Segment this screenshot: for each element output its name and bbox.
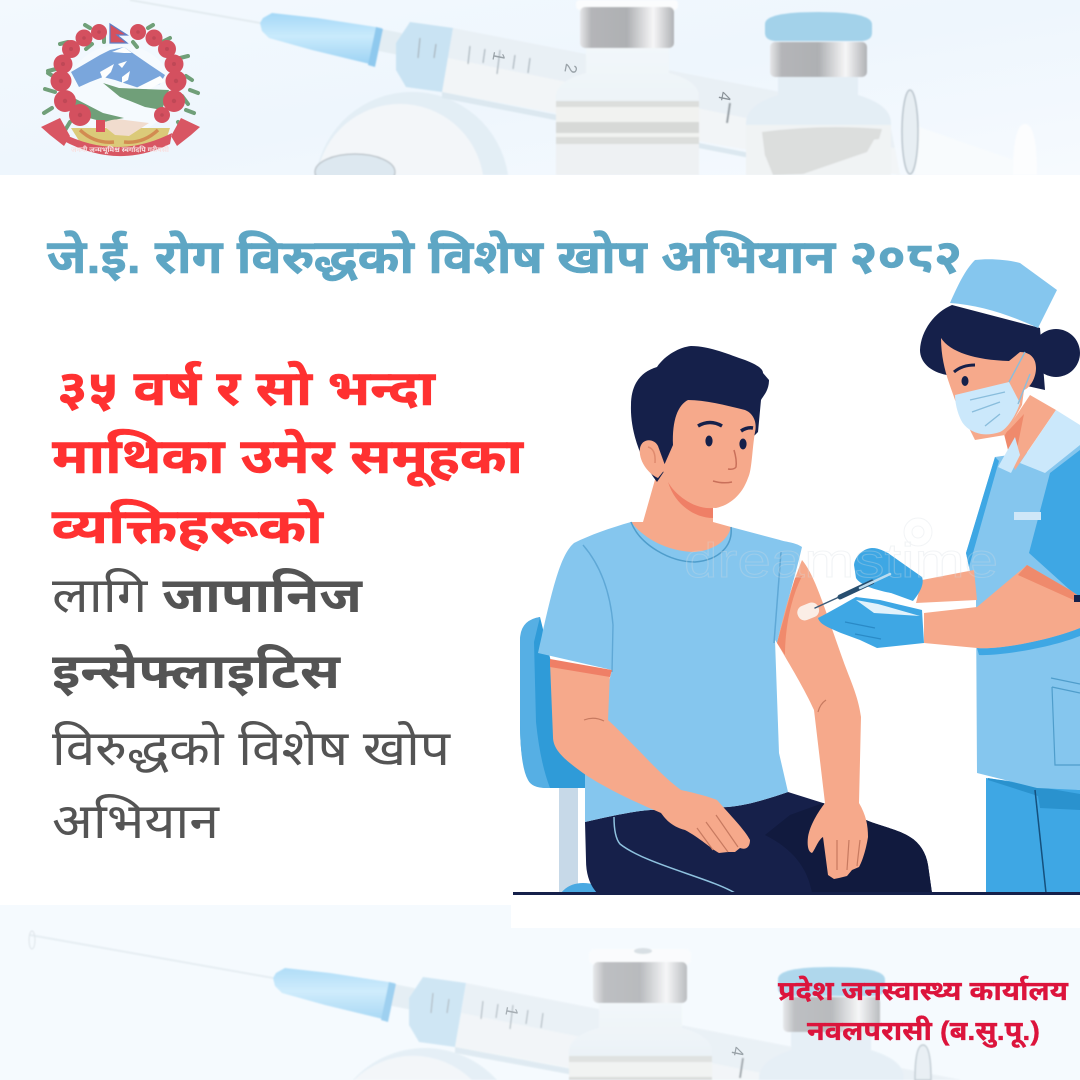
- nurse forearm holding arm: [916, 570, 977, 603]
- emblem: white field: [68, 45, 172, 135]
- bottom banner: syringe and vaccine vials photo: [0, 905, 1080, 1080]
- stock image watermark: dreamstime: [684, 535, 998, 588]
- nurse uniform: [966, 445, 1080, 790]
- message line 5: इन्सेफ्लाइटिस: [52, 643, 341, 699]
- nurse face: [941, 338, 1036, 440]
- top glove: [854, 548, 923, 601]
- emblem: flag: [110, 24, 127, 43]
- emblem: base: [71, 128, 170, 150]
- message line 4: लागि जापानिज: [52, 567, 364, 623]
- top banner: syringe and vaccine vials photo: 4: [714, 90, 735, 103]
- nurse trousers: [986, 778, 1080, 893]
- nurse eye and brow: [962, 376, 968, 386]
- bottom banner: syringe and vaccine vials photo: 1: [501, 1005, 522, 1018]
- nurse collar: [998, 410, 1080, 473]
- message line 7: अभियान: [52, 793, 220, 849]
- patient trousers: [585, 792, 932, 893]
- nurse cap: [950, 259, 1057, 328]
- text block: campaign message: [51, 360, 525, 849]
- highlighted age group line 3: व्यक्तिहरूको: [51, 498, 325, 554]
- emblem: mountain: [71, 47, 165, 90]
- illustration: vaccination scene: [513, 259, 1080, 895]
- message line 6: विरुद्धको विशेष खोप: [52, 720, 451, 776]
- top banner: syringe and vaccine vials photo: 1: [488, 50, 509, 63]
- highlighted age group line 1: ३५ वर्ष र सो भन्दा: [57, 360, 437, 416]
- floor line: [513, 892, 1080, 895]
- emblem: handshake: [105, 119, 149, 136]
- top banner: syringe and vaccine vials photo: [0, 0, 1080, 190]
- emblem: flower centres: [59, 30, 178, 117]
- chair: [520, 617, 608, 893]
- patient hair: [631, 346, 769, 482]
- office name: [778, 975, 1069, 1048]
- emblem: rhododendron wreath: [50, 24, 186, 126]
- stock image watermark: [684, 518, 998, 588]
- highlighted age group line 2: माथिका उमेर समूहका: [52, 428, 525, 488]
- patient neck: [631, 462, 731, 552]
- emblem: green hills: [74, 83, 169, 122]
- patient eyes: [705, 436, 713, 446]
- title: जे.ई. रोग विरुद्धको विशेष खोप अभियान २०८२: [47, 230, 962, 283]
- emblem: banner: [41, 118, 200, 156]
- bottom banner: syringe and vaccine vials photo: 4: [727, 1045, 748, 1058]
- patient face: [662, 400, 756, 508]
- nurse hair: [920, 305, 1045, 390]
- bottom glove: [818, 597, 924, 648]
- top banner: syringe and vaccine vials photo: 2: [560, 62, 581, 75]
- emblem of Nepal: [41, 24, 200, 156]
- nurse neck: [1005, 395, 1056, 470]
- white cut-out over bottom banner: [511, 905, 1080, 928]
- patient t-shirt: [538, 522, 802, 822]
- office name line 2: नवलपरासी (ब.सु.पू.): [807, 1016, 1040, 1048]
- office name line 1: प्रदेश जनस्वास्थ्य कार्यालय: [778, 975, 1069, 1006]
- patient left arm: [550, 662, 750, 853]
- syringe in nurse hand: [815, 574, 890, 608]
- patient brows: [698, 422, 753, 431]
- emblem: laurel: [80, 130, 158, 142]
- patient nose and mouth: [713, 450, 736, 483]
- shirt collar rib: [631, 522, 731, 562]
- emblem: wreath leaves: [44, 25, 198, 132]
- emblem: snow patches: [100, 47, 165, 90]
- nurse mask: [955, 352, 1030, 434]
- patient right arm: [777, 560, 868, 879]
- emblem: banner motto: जननी जन्मभूमिश्च स्वर्गादपि गरीयसी: [71, 145, 170, 155]
- white bandage on patient arm: [795, 600, 821, 623]
- patient ear: [640, 440, 666, 478]
